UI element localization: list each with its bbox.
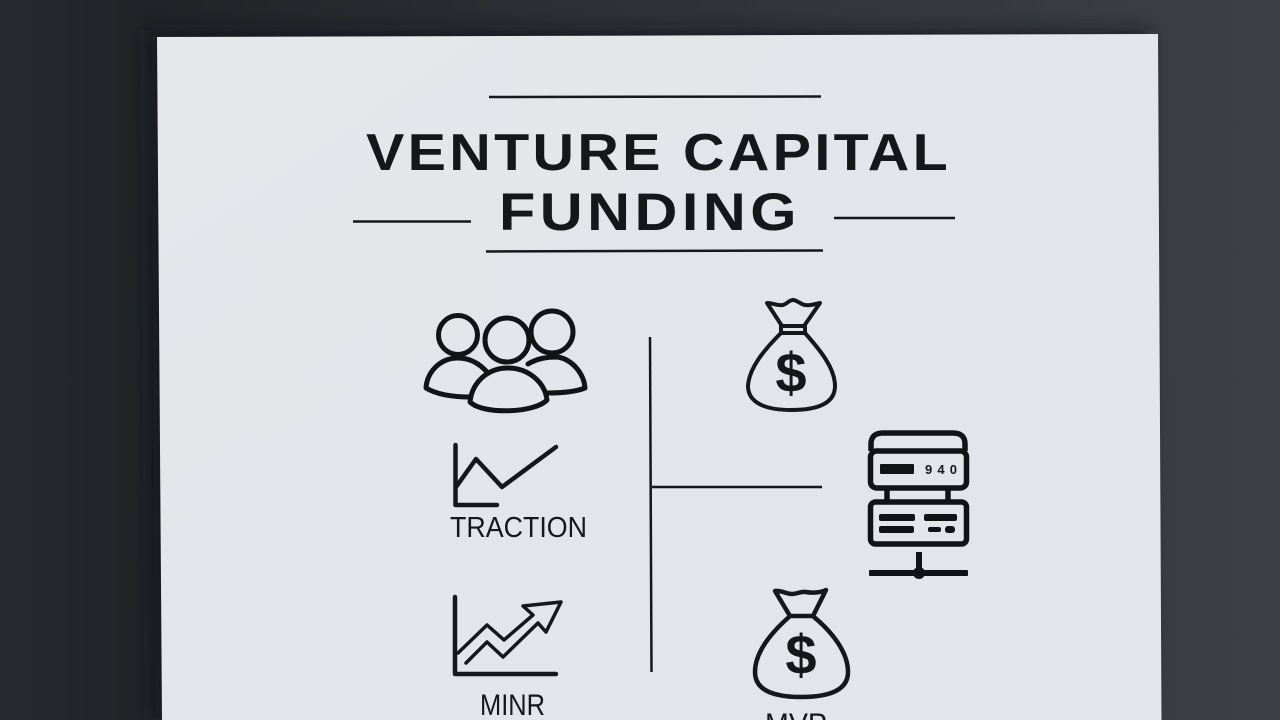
title line 2: FUNDING (499, 183, 801, 242)
title line 1: VENTURE CAPITAL (366, 124, 951, 182)
dollar sign upper: $ (775, 341, 807, 404)
vertical divider (650, 337, 652, 672)
label: traction: TRACTION (450, 512, 587, 544)
icon: traction chart (456, 445, 556, 505)
title block (353, 96, 955, 252)
icon: team of people (426, 311, 585, 411)
icon: growth chart with arrow (455, 597, 561, 674)
icon: money bag upper (748, 300, 835, 410)
paper sheet (157, 34, 1162, 720)
icon: server stack (869, 433, 968, 579)
server readout digits: 940 (925, 462, 957, 477)
paper shadow (146, 30, 1152, 720)
dollar sign lower: $ (785, 623, 817, 686)
horizontal connector (652, 486, 822, 488)
icon: money bag lower (755, 590, 848, 697)
